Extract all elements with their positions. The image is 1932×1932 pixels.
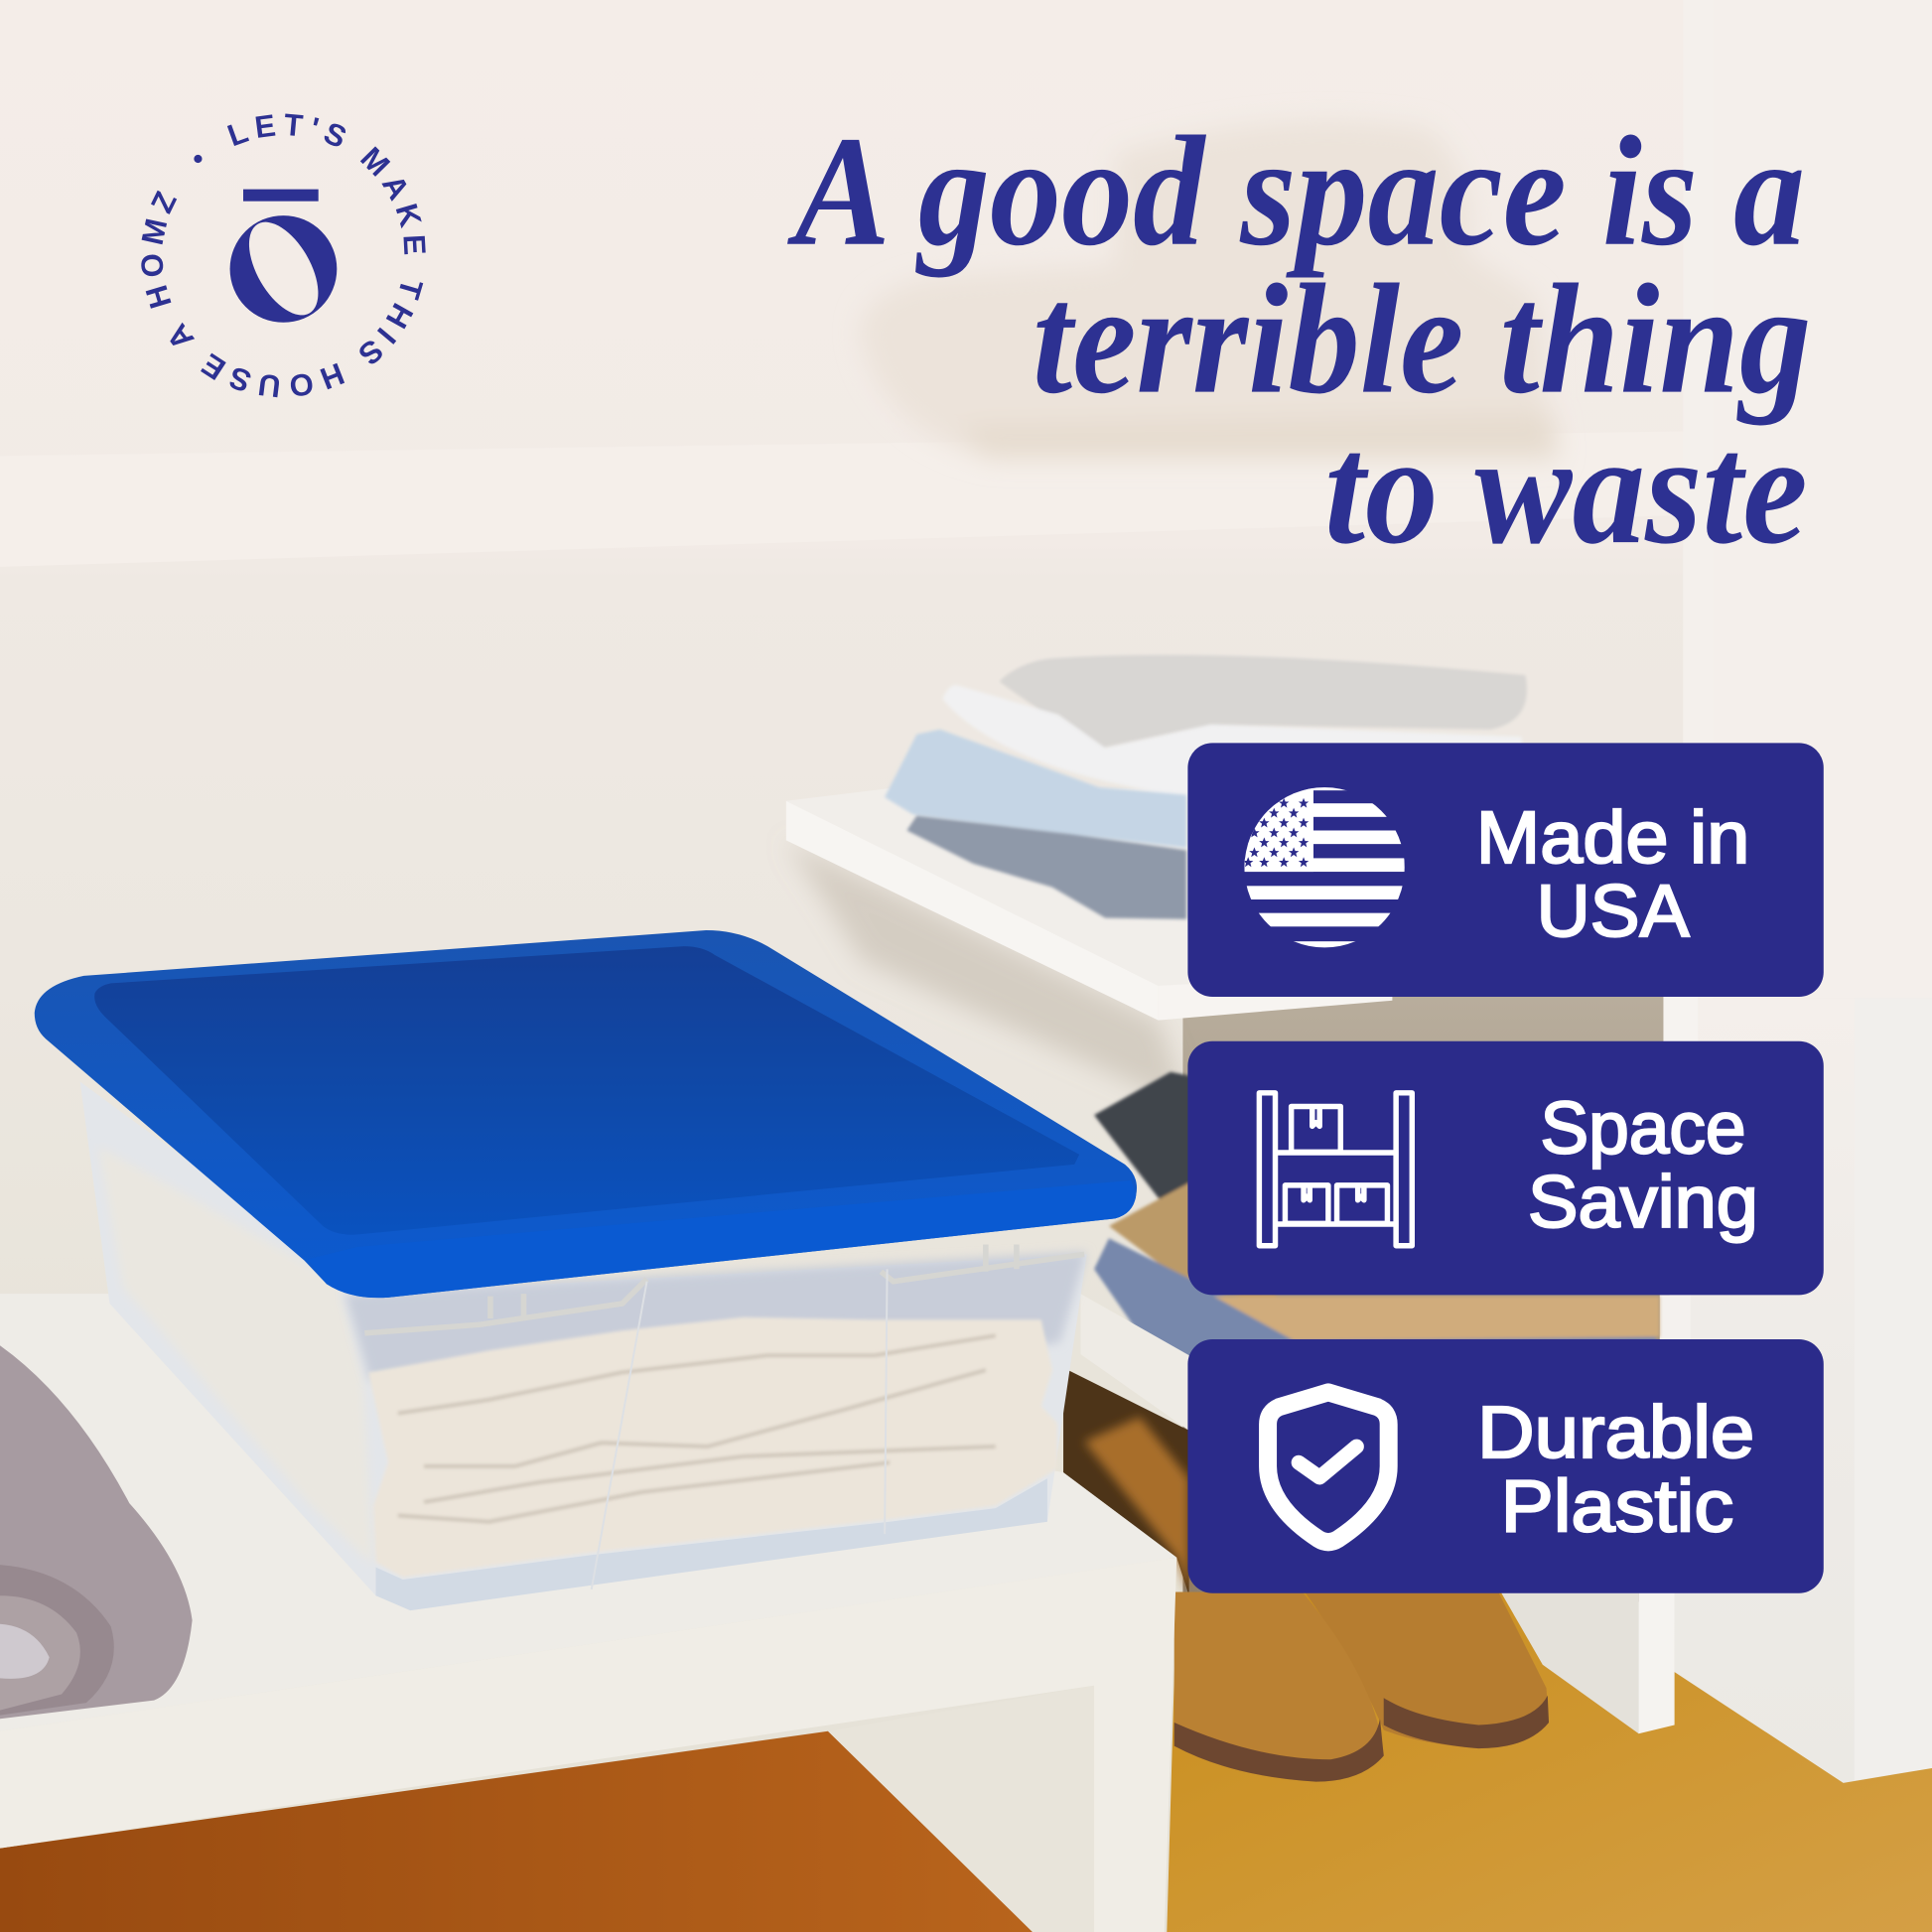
headline: A good space is a <box>786 104 1805 279</box>
label: made in USA <box>1476 796 1749 952</box>
icon: shelving with boxes <box>1259 1093 1412 1246</box>
headline: to waste <box>1324 402 1808 577</box>
badge: durable plastic <box>1187 1339 1824 1593</box>
shoes in shadow <box>1063 1368 1189 1595</box>
label: made in USA: USA <box>1537 870 1690 952</box>
headline <box>786 104 1811 577</box>
icon: american flag circle <box>1238 783 1405 949</box>
label: space saving: Saving <box>1528 1161 1758 1243</box>
linen fold lines <box>398 1335 996 1522</box>
shoes <box>1174 1591 1549 1782</box>
faded upper shelf <box>0 431 1688 567</box>
circular tagline: LET'S MAKE THIS HOUSE A HOMZ <box>141 113 426 397</box>
box side contents <box>98 1146 373 1565</box>
bench top <box>0 1294 1176 1731</box>
lower shelf <box>1080 1294 1189 1431</box>
lid front edge <box>308 1180 1136 1298</box>
box seam <box>592 1269 888 1589</box>
separator dot <box>194 155 203 163</box>
box front upper shade <box>345 1252 1087 1380</box>
central upright panel <box>1501 1591 1639 1733</box>
lid recessed top <box>94 946 1079 1235</box>
closet back recess <box>1182 986 1670 1601</box>
badge: space saving <box>1187 1041 1824 1295</box>
logo mark ring <box>230 215 337 323</box>
label: space saving <box>1528 1087 1758 1243</box>
rolled towel <box>0 1345 193 1719</box>
label: durable plastic: Durable <box>1477 1391 1754 1473</box>
storage box <box>35 930 1137 1610</box>
bench inner leg <box>828 1686 1094 1932</box>
label: durable plastic <box>1477 1391 1754 1548</box>
headline: terrible thing <box>1033 252 1811 427</box>
floor right <box>1167 1591 1932 1932</box>
faded towels on upper shelf <box>860 121 1559 459</box>
badge: made in USA <box>1187 743 1824 997</box>
icon: shield with check <box>1268 1392 1389 1542</box>
folded linen inside <box>368 1317 1057 1578</box>
label: space saving: Space <box>1540 1087 1746 1170</box>
logo mark hole <box>235 210 333 327</box>
floor under bench <box>0 1731 1033 1932</box>
label: made in USA: Made in <box>1476 796 1749 879</box>
box body <box>80 1082 1087 1610</box>
label: durable plastic: Plastic <box>1501 1465 1733 1548</box>
upper shelf <box>786 788 1663 1021</box>
lid rim <box>35 930 1137 1298</box>
box rim tabs <box>364 1244 1084 1333</box>
bench front <box>0 1558 1176 1932</box>
shadow below upper shelf <box>786 840 1189 1109</box>
folded clothes on upper shelf <box>885 655 1527 919</box>
folded clothes lower shelf <box>1094 1072 1660 1361</box>
logo mark bar <box>243 190 319 202</box>
box bottom clear strip <box>376 1478 1047 1610</box>
right wall panel <box>1675 998 1932 1783</box>
logo badge <box>141 113 426 397</box>
